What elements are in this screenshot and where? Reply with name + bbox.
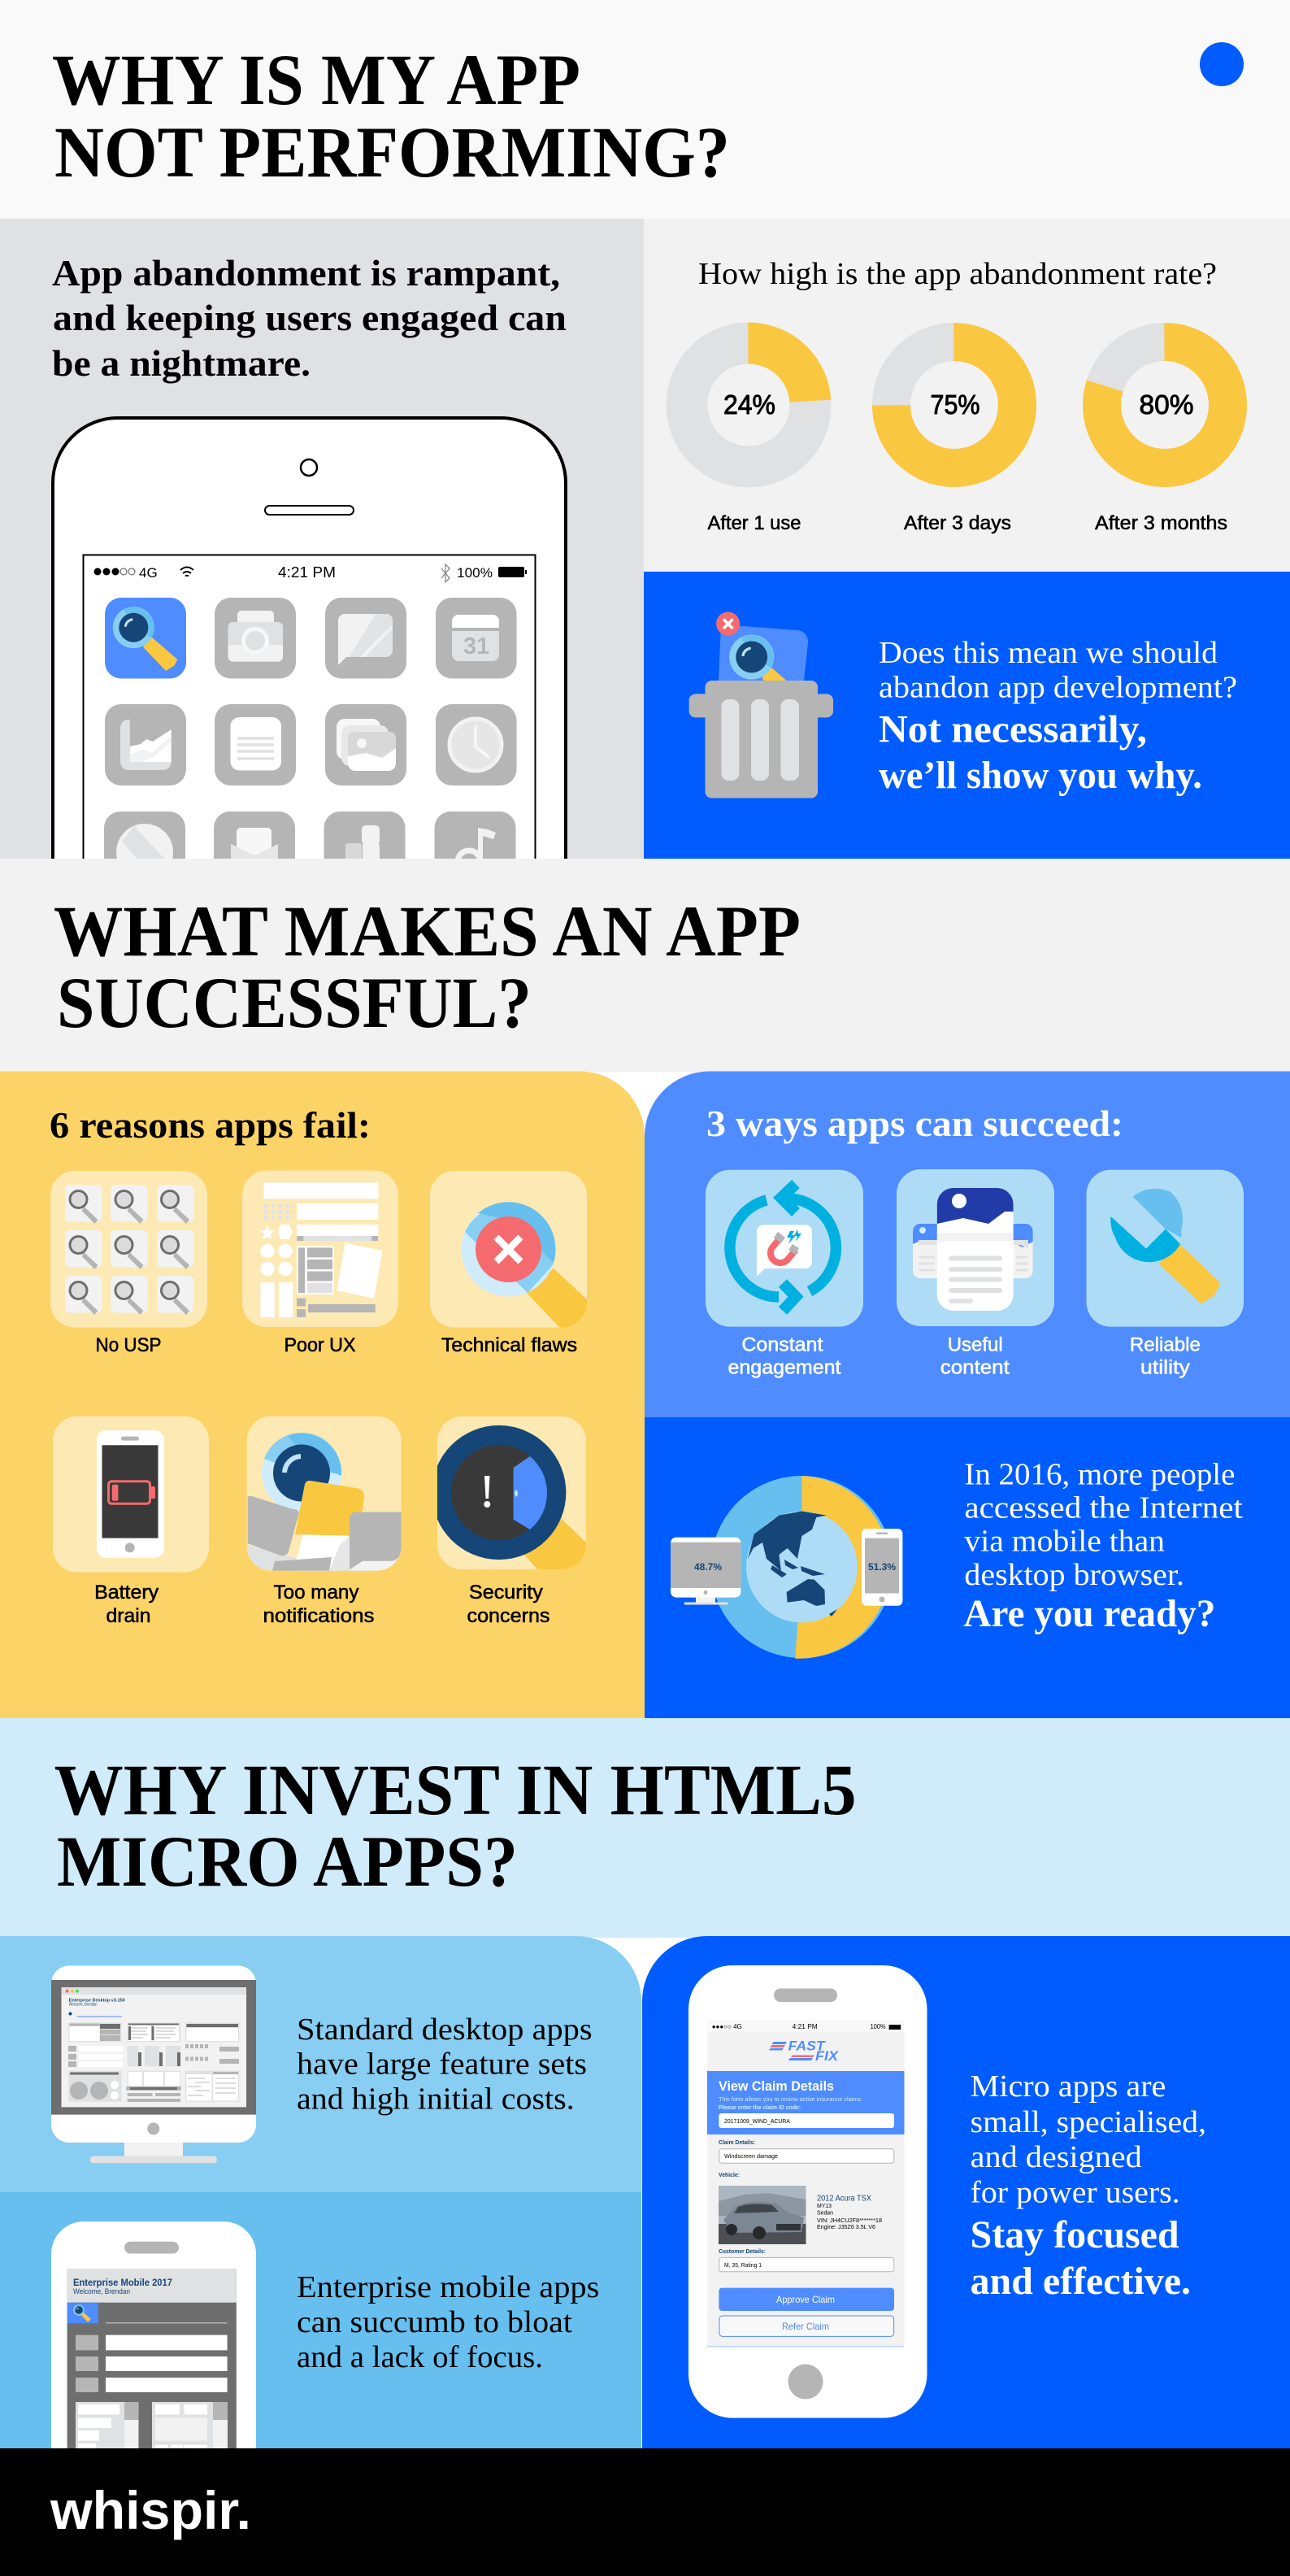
- icon: music: [434, 812, 515, 877]
- button: approve claim: Approve Claim: [776, 2294, 835, 2305]
- text: abandonment statement: App abandonment is rampant,: [52, 252, 560, 294]
- heading: abandonment rate question: How high is the app abandonment rate?: [698, 257, 1217, 291]
- phone outline with app grid: [53, 418, 566, 881]
- donut chart: 24 percent: After 1 use: [707, 512, 801, 534]
- icon: messages: [325, 598, 406, 678]
- icon: app in trash can: [689, 611, 833, 798]
- text: micro apps statement: [971, 2069, 1206, 2303]
- icon: notes: [215, 704, 296, 785]
- text: callout: Does this mean we should: [879, 636, 1218, 670]
- label: Battery drain: [94, 1582, 159, 1627]
- panel: app abandonment with phone: [0, 219, 644, 881]
- title: what makes an app successful: SUCCESSFUL?: [57, 964, 532, 1043]
- app screen: view claim details: M, 35, Rating 1: [724, 2261, 762, 2269]
- icon: phone 51.3%: [862, 1529, 902, 1606]
- text: standard desktop apps: have large feature sets: [297, 2047, 587, 2082]
- status bar: [94, 564, 527, 582]
- illustration: desktop monitor: [51, 1965, 256, 2163]
- section band: why invest in html5 micro apps: [0, 1718, 1290, 1938]
- panel: 3 ways apps can succeed: [645, 1072, 1290, 1417]
- status bar: 100%: [457, 565, 493, 581]
- icon tile: poor UX: [242, 1171, 398, 1327]
- illustration: desktop monitor: Welcome, Brendan: [69, 2002, 98, 2007]
- icon tile: battery drain: [53, 1416, 209, 1573]
- icon tile: security concerns: [432, 1416, 586, 1570]
- donut chart: 80 percent: After 3 months: [1095, 512, 1227, 534]
- label: Too many notifications: [263, 1582, 374, 1627]
- text: abandonment statement: [52, 252, 567, 384]
- panel: enterprise mobile apps: [0, 2192, 641, 2452]
- donut chart: 75 percent: After 3 days: [904, 512, 1011, 534]
- app screen: view claim details: ●●●○○ 4G: [712, 2023, 742, 2030]
- icon: calendar: [436, 598, 517, 678]
- icon tile: too many notifications: [247, 1416, 402, 1571]
- section band: what makes an app successful: [0, 859, 1290, 1072]
- app screen: view claim details: Vehicle:: [719, 2171, 740, 2178]
- label: Too many notifications: Too many: [273, 1582, 359, 1603]
- title: why is my app not performing: [52, 41, 730, 193]
- heading: 6 reasons: 6 reasons apps fail:: [50, 1104, 371, 1146]
- logo: Fast Fix: FAST: [788, 2038, 826, 2053]
- donut chart: 24 percent: [687, 343, 810, 534]
- label: Useful content: content: [940, 1357, 1010, 1379]
- text: standard desktop apps: Standard desktop apps: [297, 2012, 593, 2047]
- text: mobile overtakes desktop: In 2016, more people: [964, 1458, 1235, 1492]
- text: enterprise mobile apps: [297, 2270, 599, 2374]
- logo: Fast Fix: [769, 2038, 840, 2064]
- footer: [0, 2448, 1290, 2576]
- donut chart: 75 percent: [891, 342, 1018, 534]
- text: mobile overtakes desktop: [963, 1458, 1243, 1635]
- app screen: view claim details: This form allows you to review active insurance claims.: [719, 2097, 862, 2103]
- icon: desktop 48.7%: 48.7%: [694, 1561, 722, 1573]
- logo: whispir: whispir.: [50, 2480, 251, 2540]
- label: Security concerns: concerns: [467, 1605, 549, 1627]
- icon tile: constant engagement: [706, 1170, 863, 1327]
- label: Reliable utility: [1130, 1334, 1201, 1379]
- text: callout: abandon app development?: [879, 670, 1237, 704]
- title: why invest in html5 micro apps: WHY INVEST IN HTML5: [54, 1751, 857, 1830]
- donut chart: 75 percent: 75%: [930, 389, 980, 420]
- icon: photos: [325, 704, 406, 785]
- donut chart: 24 percent: 24%: [723, 389, 775, 420]
- status bar: 4G: [139, 565, 158, 581]
- label: Security concerns: [467, 1582, 549, 1627]
- label: Security concerns: Security: [469, 1582, 543, 1603]
- illustration: desktop monitor: Enterprise Desktop v3.156: [69, 1998, 125, 2003]
- button: refer claim: Refer Claim: [782, 2321, 829, 2332]
- app screen: view claim details: Claim Details:: [719, 2139, 755, 2146]
- text: mobile overtakes desktop: via mobile than: [964, 1525, 1165, 1559]
- label: Constant engagement: [728, 1334, 841, 1379]
- title: what makes an app successful: WHAT MAKES AN APP: [54, 892, 801, 972]
- header band: [0, 0, 1290, 219]
- status bar: 4:21 PM: [278, 564, 336, 581]
- photo: Acura TSX: [719, 2186, 806, 2244]
- map: continents: [748, 1511, 837, 1617]
- app screen: view claim details: 2012 Acura TSX: [817, 2195, 871, 2204]
- label: Technical flaws: Technical flaws: [441, 1334, 577, 1356]
- label: Constant engagement: Constant: [741, 1334, 823, 1356]
- icon tile: reliable utility: [1086, 1170, 1244, 1327]
- illustration: enterprise mobile phone: Enterprise Mobile 2017: [73, 2277, 172, 2288]
- label: Battery drain: Battery: [94, 1582, 159, 1603]
- app screen: view claim details: Windscreen damage: [724, 2152, 778, 2160]
- app screen: view claim details: VIN: JH4CU2F8*******18: [817, 2218, 882, 2224]
- text: enterprise mobile apps: can succumb to bloat: [297, 2305, 572, 2339]
- illustration: micro app phone: [688, 1965, 927, 2418]
- text: callout: we’ll show you why.: [879, 754, 1202, 797]
- panel: 6 reasons apps fail: [0, 1072, 645, 1718]
- icon: mail: [214, 812, 295, 877]
- label: Constant engagement: engagement: [728, 1357, 841, 1379]
- text: abandonment statement: be a nightmare.: [52, 342, 311, 384]
- icon: stocks chart: [105, 704, 186, 785]
- app screen: view claim details: Customer Details:: [719, 2247, 766, 2255]
- text: mobile overtakes desktop: Are you ready?: [963, 1592, 1215, 1635]
- icon: camera: [215, 598, 296, 678]
- icon: blue dot: [1200, 42, 1244, 86]
- icon: phone 51.3%: 51.3%: [868, 1561, 896, 1573]
- label: Useful content: [940, 1334, 1010, 1379]
- app screen: view claim details: Please enter the claim ID code:: [719, 2105, 801, 2111]
- text: abandonment statement: and keeping users engaged can: [53, 297, 567, 338]
- icon tile: no USP: [50, 1171, 207, 1327]
- text: micro apps statement: and effective.: [971, 2260, 1191, 2303]
- icon tile: useful content: [897, 1169, 1054, 1326]
- app screen: view claim details: [707, 2020, 904, 2347]
- text: mobile overtakes desktop: accessed the Internet: [964, 1491, 1243, 1525]
- icon: calendar: 31: [463, 633, 489, 659]
- label: Too many notifications: notifications: [263, 1605, 374, 1627]
- label: Poor UX: Poor UX: [284, 1334, 356, 1356]
- text: callout: Not necessarily,: [879, 707, 1147, 751]
- app screen: view claim details: View Claim Details: [719, 2078, 834, 2094]
- label: Reliable utility: utility: [1140, 1357, 1190, 1379]
- button: approve claim: [719, 2288, 894, 2311]
- heading: 3 ways: 3 ways apps can succeed:: [706, 1103, 1123, 1144]
- illustration: enterprise mobile phone: Welcome, Brendan: [73, 2287, 130, 2295]
- icon tile: technical flaws: [430, 1171, 587, 1328]
- app screen: view claim details: 4:21 PM: [793, 2023, 818, 2030]
- app screen: view claim details: Sedan: [817, 2211, 833, 2217]
- icon: compass: [104, 812, 185, 881]
- illustration: enterprise mobile phone: [51, 2221, 256, 2452]
- label: Reliable utility: Reliable: [1130, 1334, 1201, 1356]
- icon: search app: [105, 598, 186, 678]
- button: refer claim: [719, 2316, 894, 2336]
- chart: globe donut with devices: [671, 1476, 902, 1659]
- title: what makes an app successful: [54, 892, 801, 1043]
- text: enterprise mobile apps: Enterprise mobile apps: [297, 2270, 599, 2304]
- title: why is my app not performing: WHY IS MY APP: [52, 41, 580, 120]
- panel: micro apps: [642, 1936, 1290, 2452]
- label: Useful content: Useful: [948, 1334, 1003, 1356]
- text: micro apps statement: Stay focused: [971, 2213, 1179, 2256]
- icon: desktop 48.7%: [671, 1538, 741, 1605]
- icon: app store blocks: [324, 812, 405, 877]
- text: callout: [879, 636, 1237, 797]
- text: micro apps statement: Micro apps are: [971, 2069, 1166, 2104]
- app screen: view claim details: 100%: [871, 2023, 886, 2030]
- app screen: view claim details: Engine: J35Z6 3.5L V6: [817, 2225, 875, 2230]
- label: No USP: No USP: [96, 1334, 161, 1356]
- mock screens: [68, 2022, 239, 2102]
- app screen: view claim details: MY13: [817, 2204, 832, 2209]
- donut chart: 80 percent: 80%: [1140, 389, 1193, 420]
- text: enterprise mobile apps: and a lack of focus.: [297, 2340, 543, 2374]
- title: why is my app not performing: NOT PERFORMING?: [54, 113, 730, 193]
- app screen: view claim details: 20171009_WIND_ACURA: [724, 2117, 790, 2125]
- panel: mobile vs desktop usage: [645, 1417, 1290, 1718]
- panel: abandonment rate: [644, 219, 1290, 572]
- label: Battery drain: drain: [106, 1605, 151, 1627]
- donut chart: 80 percent: [1095, 342, 1227, 534]
- text: standard desktop apps: and high initial costs.: [297, 2082, 575, 2116]
- panel: should we abandon callout: [644, 572, 1290, 859]
- logo: Fast Fix: FIX: [815, 2048, 840, 2064]
- panel: standard desktop apps: [0, 1936, 641, 2192]
- text: micro apps statement: for power users.: [971, 2176, 1180, 2210]
- icon: clock: [436, 704, 517, 785]
- title: why invest in html5 micro apps: [54, 1751, 857, 1902]
- text: micro apps statement: small, specialised,: [971, 2105, 1206, 2139]
- text: micro apps statement: and designed: [971, 2140, 1142, 2174]
- title: why invest in html5 micro apps: MICRO APPS?: [57, 1822, 518, 1902]
- text: mobile overtakes desktop: desktop browser.: [964, 1558, 1184, 1592]
- text: standard desktop apps: [297, 2012, 593, 2116]
